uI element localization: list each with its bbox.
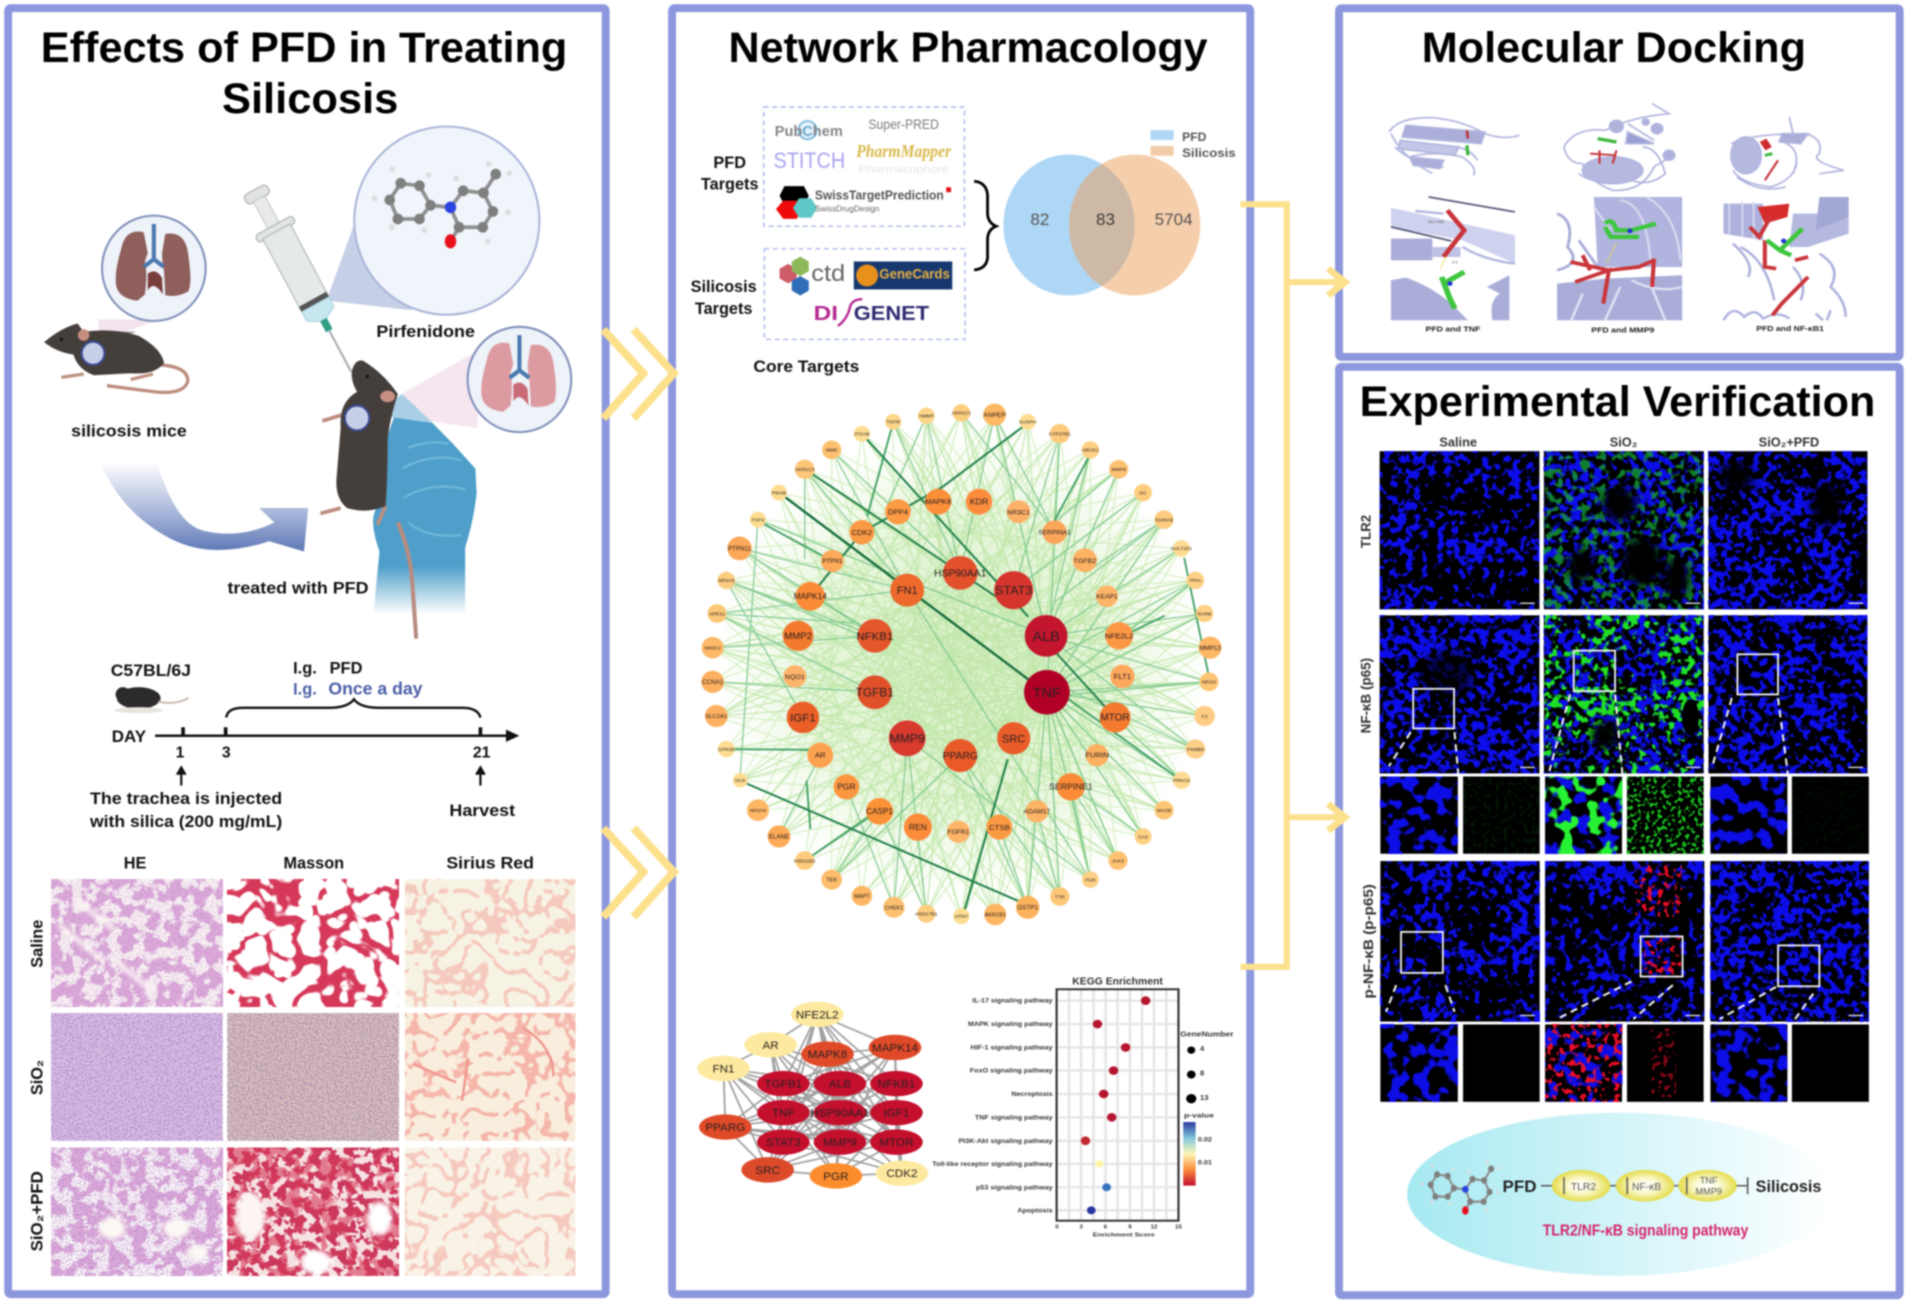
chart: hub gene subnetwork: MAPK8 <box>808 1050 847 1061</box>
nodes: inner ring targets: FLT1 <box>1114 672 1131 681</box>
nodes: outer ring targets: GC <box>1139 491 1147 496</box>
timeline: experimental schedule <box>89 660 519 831</box>
title: Molecular Docking: Molecular Docking <box>1422 24 1806 72</box>
nodes: inner ring targets: SERPINE1 <box>1049 782 1093 792</box>
labels: pathway names: HIF-1 signaling pathway <box>971 1045 1053 1051</box>
nodes: inner ring targets: CTSB <box>989 823 1010 832</box>
nodes: outer ring targets: AKR1B1 <box>985 912 1006 918</box>
text: tracheal silica injection: with silica (200 mg/mL) <box>89 813 282 831</box>
title: Experimental Verification: Experimental Verification <box>1360 378 1875 426</box>
title: Effects of PFD in Treating Silicosis: Silicosis <box>222 75 398 123</box>
icon: recovered lung callout <box>402 327 571 432</box>
nodes: central hub targets: MMP9 <box>890 732 925 746</box>
brace: dosing period <box>226 699 480 718</box>
nodes: outer ring targets: FGF2 <box>752 518 765 523</box>
node: TLR2 <box>1552 1170 1610 1202</box>
nodes: central hub targets: ALB <box>1033 629 1060 645</box>
panel: effects of PFD in treating silicosis <box>8 8 606 1294</box>
logo: DisGeNET: GENET <box>854 302 930 325</box>
nodes: outer ring targets: FGR <box>1085 877 1096 883</box>
labels: pathway names <box>932 998 1053 1214</box>
heading: group row labels: SiO₂ <box>29 1060 47 1095</box>
nodes: outer ring targets: PPIA <box>1190 578 1202 584</box>
nodes: central hub targets: SRC <box>1002 733 1025 745</box>
nodes: outer ring targets: DCK <box>735 778 746 784</box>
nodes: outer ring targets: HSD11B1 <box>794 858 816 864</box>
arrow: connector from network pharmacology to docking and verification <box>1241 204 1345 967</box>
labels: treatment columns: Saline <box>1439 434 1477 449</box>
nodes: inner ring targets: NQO1 <box>785 674 805 681</box>
text: tracheal silica injection <box>89 790 282 831</box>
chart: hub gene subnetwork <box>697 1002 928 1189</box>
labels: pathway names: PI3K-Akt signaling pathway <box>958 1138 1053 1145</box>
chart: hub gene subnetwork: MMP9 <box>823 1138 857 1149</box>
label: Silicosis Targets: Silicosis <box>691 278 757 296</box>
insets: NF-κB SiO2 <box>1545 777 1704 854</box>
nodes: inner ring targets: MTOR <box>1100 713 1130 724</box>
icon: treatment arrow <box>100 462 308 552</box>
chart: hub gene subnetwork: NFE2L2 <box>796 1010 839 1021</box>
nodes: inner ring targets: FURIN <box>1085 751 1109 760</box>
panel: experimental verification <box>1339 367 1900 1295</box>
image: TLR2 SiO2 <box>1544 451 1704 609</box>
nodes: inner ring targets: SERPINA1 <box>1038 529 1071 536</box>
nodes: outer ring targets: MMP8 <box>1112 467 1126 473</box>
legend: gene number: 13 <box>1200 1093 1209 1102</box>
heading: stain column labels <box>124 854 534 872</box>
chart: hub gene subnetwork: STAT3 <box>766 1138 801 1149</box>
image: Sirius Red SiO2 <box>405 1013 575 1141</box>
labels: pathway names: MAPK signaling pathway <box>968 1021 1053 1028</box>
nodes: outer ring targets: CHEK1 <box>885 906 903 911</box>
image: Masson saline <box>227 879 399 1007</box>
icon: silicosis mouse <box>44 323 188 392</box>
legend: p-value colour bar: p-value <box>1184 1113 1214 1120</box>
labels: day numbers <box>176 745 491 762</box>
chart: hub gene subnetwork: SRC <box>755 1165 780 1177</box>
nodes: outer ring targets: TEK <box>826 877 837 883</box>
nodes: inner ring targets: MMP2 <box>784 631 812 642</box>
chart: Venn diagram of targets: 83 <box>1096 210 1115 229</box>
docking: PFD and TNF close-up <box>1391 197 1515 320</box>
docking: PFD and MMP9 close-up <box>1557 197 1682 320</box>
nodes: central hub targets: HSP90AA1 <box>934 569 987 579</box>
nodes: central hub targets: PPARG <box>943 751 978 762</box>
nodes: outer ring targets: MME <box>826 448 838 454</box>
legend: gene number: GeneNumber <box>1180 1030 1234 1038</box>
node: TNF and MMP9: TNF <box>1700 1175 1718 1185</box>
image: HE SiO2+PFD <box>51 1148 223 1276</box>
arrow: silica injection <box>177 767 186 786</box>
nodes: central hub targets: TGFB1 <box>856 687 894 700</box>
labels: day numbers: 21 <box>473 745 491 762</box>
image: NF-κB SiO2 <box>1544 615 1704 773</box>
chart: Venn diagram of targets: 82 <box>1030 210 1049 229</box>
image: Masson SiO2+PFD <box>227 1148 399 1276</box>
nodes: outer ring targets: ABCD1 <box>1082 448 1099 454</box>
image: TLR2 saline <box>1380 451 1539 609</box>
panel: molecular docking <box>1339 8 1900 357</box>
logo: PharmMapper: PharmMapper <box>855 141 951 161</box>
label: I.g. PFD: PFD <box>330 660 363 678</box>
heading: group row labels: Saline <box>29 920 47 968</box>
image: HE SiO2 <box>51 1013 223 1141</box>
nodes: outer ring targets: HTR7 <box>955 914 968 920</box>
protein: NF-κB1 overview <box>1731 117 1844 189</box>
node: NF-κB: NF-κB <box>1632 1182 1661 1193</box>
nodes: inner ring targets: PTPN1 <box>822 558 843 565</box>
inhibition lines <box>1541 1177 1748 1194</box>
logo: faint caption: Pharmacophore <box>859 165 949 176</box>
image: TLR2 SiO2+PFD <box>1708 451 1867 609</box>
label: silicosis mice: silicosis mice <box>71 423 187 441</box>
node: TLR2: TLR2 <box>1571 1182 1596 1193</box>
image: p-NF-κB SiO2+PFD <box>1710 861 1869 1022</box>
nodes: central hub targets <box>856 556 1070 772</box>
label: I.g. PFD: I.g. <box>293 660 317 678</box>
nodes: inner ring targets: FGFR1 <box>948 829 970 836</box>
axis: enrichment score: 6 <box>1104 1225 1108 1231</box>
labels: marker rows: p-NF-κB (p-p65) <box>1361 884 1376 998</box>
label: Core Targets: Core Targets <box>753 358 859 376</box>
legend: p-value colour bar <box>1183 1113 1214 1186</box>
illustration: pirfenidone treatment of silicosis mice <box>44 126 571 639</box>
labels: marker rows: TLR2 <box>1359 515 1374 548</box>
nodes: outer ring targets: GPR35 <box>718 747 735 753</box>
nodes: inner ring targets: AR <box>815 751 826 760</box>
label: treated with PFD: treated with PFD <box>227 579 369 597</box>
axis: enrichment score: 0 <box>1055 1225 1059 1231</box>
heading: group row labels: SiO₂+PFD <box>29 1171 47 1251</box>
labels: docking pairs: PFD and TNF <box>1426 325 1481 333</box>
axis: enrichment score: Enrichment Score <box>1093 1233 1156 1239</box>
image: p-NF-κB saline <box>1380 861 1540 1022</box>
nodes: outer ring targets: APEX1 <box>709 611 725 617</box>
legend: Venn sets: Silicosis <box>1182 146 1236 160</box>
legend: p-value colour bar: 0.02 <box>1198 1137 1212 1143</box>
chart: hub gene subnetwork: MTOR <box>879 1138 914 1149</box>
labels: treatment columns: SiO₂+PFD <box>1759 434 1819 449</box>
logo: SwissTargetPrediction: SwissDrugDesign <box>815 205 879 214</box>
nodes: inner ring targets: MAPK14 <box>794 591 827 601</box>
data: enrichment points <box>1081 996 1150 1214</box>
labels: pathway names: Toll-like receptor signaling pathway <box>932 1161 1053 1168</box>
image: Sirius Red SiO2+PFD <box>405 1148 575 1276</box>
label: PFD Targets <box>701 154 759 194</box>
legend: p-value colour bar: 0.01 <box>1198 1160 1212 1166</box>
nodes: outer ring targets: PRKCK <box>1173 778 1191 784</box>
nodes: outer ring targets: CCNA2 <box>702 679 724 686</box>
nodes: inner ring targets: NFE2L2 <box>1105 631 1133 640</box>
nodes: outer ring targets: JAK3 <box>1112 858 1124 864</box>
insets: NF-κB SiO2+PFD <box>1710 777 1869 854</box>
image: p-NF-κB SiO2 <box>1545 861 1704 1022</box>
nodes: outer ring targets: ELANE <box>769 834 789 841</box>
axis: enrichment score: 3 <box>1079 1225 1084 1231</box>
node: TNF and MMP9 <box>1678 1170 1737 1202</box>
label: C57BL/6J: C57BL/6J <box>111 662 191 680</box>
chart: core target network <box>701 404 1222 925</box>
nodes: central hub targets: FN1 <box>897 585 918 597</box>
nodes: central hub targets: STAT3 <box>995 584 1032 597</box>
labels: pathway names: TNF signaling pathway <box>975 1115 1053 1121</box>
icon: syringe <box>236 180 370 382</box>
axis: enrichment score <box>1055 1225 1183 1239</box>
logo: STITCH: STITCH <box>774 148 845 173</box>
chart: hub gene subnetwork: PPARG <box>705 1122 745 1134</box>
nodes: outer ring targets: MMP13 <box>1199 645 1221 652</box>
nodes: outer ring targets: PSMB9 <box>1187 747 1204 753</box>
labels: pathway names: IL-17 signaling pathway <box>972 998 1053 1005</box>
legend: gene number <box>1180 1030 1234 1103</box>
nodes: inner ring targets: REN <box>909 822 927 832</box>
nodes: outer ring targets: SULT1E1 <box>1171 546 1192 552</box>
nodes: outer ring targets: SLC2A1 <box>705 714 727 720</box>
image: Sirius Red saline <box>405 879 575 1007</box>
nodes: outer ring targets: HSD17B1 <box>915 912 938 918</box>
nodes: outer ring targets: NR1H3 <box>718 578 735 584</box>
nodes: outer ring targets: ITGAB <box>854 432 870 437</box>
nodes: inner ring targets: CASP1 <box>866 807 893 816</box>
image: NF-κB saline <box>1380 615 1539 773</box>
chart: hub gene subnetwork: MAPK14 <box>872 1043 918 1054</box>
nodes: outer ring targets: NR1I2 <box>1202 680 1216 686</box>
labels: docking pairs: PFD and MMP9 <box>1591 326 1654 334</box>
legend: gene number: 4 <box>1200 1044 1205 1053</box>
logo: ctd: ctd <box>811 260 845 286</box>
image: Masson SiO2 <box>227 1013 399 1141</box>
panel: silicosis target databases <box>764 249 965 339</box>
chart: hub gene subnetwork: TNF <box>772 1108 795 1120</box>
labels: day numbers: 3 <box>222 745 231 762</box>
label: Pirfenidone: Pirfenidone <box>376 323 475 341</box>
node: NF-κB <box>1616 1170 1674 1202</box>
docking: PFD and TNF close-up: 2.9 <box>1452 260 1458 265</box>
logo: DisGeNET: DI <box>814 302 838 325</box>
axis: day timeline arrow <box>155 727 519 742</box>
title: Effects of PFD in Treating Silicosis <box>41 24 567 123</box>
labels: marker rows <box>1359 515 1376 998</box>
labels: treatment columns <box>1439 434 1819 449</box>
heading: stain column labels: HE <box>124 854 146 872</box>
logo: GeneCards: GeneCards <box>879 266 950 281</box>
panel: network pharmacology <box>672 8 1250 1294</box>
nodes: inner ring targets: MAPK8 <box>925 497 951 506</box>
nodes: inner ring targets: CDK2 <box>852 528 872 537</box>
label: Silicosis Targets: Targets <box>695 300 752 318</box>
insets: NF-κB saline <box>1380 777 1540 854</box>
insets: p-NF-κB SiO2+PFD <box>1710 1024 1869 1102</box>
axis: enrichment score: 15 <box>1175 1225 1183 1231</box>
insets: p-NF-κB SiO2 <box>1545 1024 1704 1102</box>
labels: pathway names: Necroptosis <box>1011 1091 1053 1098</box>
icon: silicosis lung callout <box>98 216 206 342</box>
labels: day numbers: 1 <box>176 745 185 762</box>
nodes: outer ring targets: AKR1C1 <box>952 411 971 417</box>
chart: Venn diagram of targets <box>1003 130 1236 296</box>
logo: SwissTargetPrediction: SwissTargetPrediction <box>815 187 944 202</box>
nodes: outer ring targets <box>701 404 1222 925</box>
histology grid <box>29 854 575 1276</box>
logo: SwissTargetPrediction <box>776 186 951 219</box>
callout: TLR2/NF-κB signaling pathway <box>1407 1113 1833 1276</box>
axis: enrichment score: 9 <box>1128 1225 1132 1231</box>
nodes: inner ring targets: NR3C1 <box>1007 509 1030 516</box>
title: Effects of PFD in Treating Silicosis: Effects of PFD in Treating <box>41 24 567 72</box>
nodes: outer ring targets: TGFR <box>886 420 900 426</box>
nodes: central hub targets: NFKB1 <box>856 631 893 643</box>
labels: marker rows: NF-κB (p65) <box>1359 658 1374 733</box>
labels: pathway names: Apoptosis <box>1017 1208 1053 1214</box>
label: Silicosis Targets <box>691 278 757 318</box>
chart: hub gene subnetwork: CDK2 <box>886 1169 917 1180</box>
nodes: outer ring targets: SUSPH <box>1019 420 1037 426</box>
icon: PFD molecule <box>1420 1161 1500 1215</box>
nodes: outer ring targets: F2 <box>1202 714 1208 720</box>
label: TLR2/NF-κB signaling pathway: TLR2/NF-κB signaling pathway <box>1543 1223 1749 1240</box>
nodes: inner ring targets: TGFB2 <box>1074 558 1096 565</box>
labels: pathway names: p53 signaling pathway <box>976 1184 1053 1191</box>
chart: hub gene subnetwork: FN1 <box>713 1064 735 1075</box>
label: PFD Targets: PFD <box>713 154 746 172</box>
nodes: outer ring targets: GSTP1 <box>1017 905 1039 911</box>
chart: hub gene subnetwork: IGF1 <box>883 1108 909 1120</box>
nodes: outer ring targets: NR3C2 <box>705 646 721 651</box>
panel: PFD target databases <box>764 107 964 226</box>
nodes: outer ring targets: ANPEP <box>983 412 1006 419</box>
nodes: inner ring targets: ADAM17 <box>1024 809 1051 815</box>
heading: stain column labels: Sirius Red <box>446 854 534 872</box>
legend: Venn sets <box>1151 130 1236 160</box>
nodes: outer ring targets: MAPT <box>854 894 870 900</box>
title: KEGG Enrichment: KEGG Enrichment <box>1072 977 1163 987</box>
brace: merge into venn <box>974 181 996 270</box>
label: DAY: DAY <box>112 727 147 746</box>
chart: hub gene subnetwork: NFKB1 <box>878 1079 915 1090</box>
nodes: inner ring targets: PGR <box>837 782 856 792</box>
label: PFD Targets: Targets <box>701 176 759 194</box>
title: Network Pharmacology: Network Pharmacology <box>729 24 1208 72</box>
labels: docking pairs <box>1426 324 1824 334</box>
annotations: magnified region boxes and zoom guides <box>1386 603 1863 1019</box>
axis: enrichment score: 12 <box>1151 1225 1158 1231</box>
icon: pirfenidone molecule callout <box>326 126 539 315</box>
nodes: outer ring targets: HMMT <box>919 414 934 420</box>
nodes: outer ring targets: NR1H4 <box>750 808 766 814</box>
logo: PubChem: PubChem <box>775 123 843 140</box>
protein: TNF overview <box>1389 118 1519 175</box>
arrow: chevron from effects panel to network pharmacology, lower <box>603 828 674 917</box>
nodes: outer ring targets: AKR1C3 <box>795 467 815 473</box>
labels: pathway names: FoxO signaling pathway <box>970 1068 1053 1074</box>
node: TNF and MMP9: MMP9 <box>1696 1186 1722 1196</box>
nodes: inner ring targets: IGF1 <box>790 713 816 724</box>
text: tracheal silica injection: The trachea is injected <box>90 790 282 808</box>
image: HE saline <box>51 879 223 1007</box>
label: Harvest: Harvest <box>449 802 516 820</box>
nodes: outer ring targets: MAOB <box>1157 808 1172 814</box>
chart: hub gene subnetwork: ALB <box>829 1079 851 1090</box>
legend: gene number: 8 <box>1200 1069 1204 1077</box>
docking: PFD and TNF close-up: GLY-153 <box>1428 219 1444 224</box>
protein: MMP9 overview <box>1564 104 1675 190</box>
icon: black mouse photo <box>114 687 189 713</box>
heading: group row labels <box>29 920 47 1251</box>
nodes: outer ring targets: PTPN11 <box>728 546 752 553</box>
nodes: central hub targets: TNF <box>1033 685 1061 701</box>
nodes: outer ring targets: CYP27B1 <box>1049 432 1071 437</box>
label: Silicosis: Silicosis <box>1756 1177 1821 1196</box>
nodes: inner ring targets: KEAP1 <box>1096 593 1118 600</box>
docking: PFD and NF-κB1 close-up <box>1724 197 1849 320</box>
nodes: outer ring targets: S100A9 <box>1155 518 1173 523</box>
heading: stain column labels: Masson <box>283 854 344 872</box>
nodes: outer ring targets: PIK4B <box>772 491 787 496</box>
nodes: inner ring targets: DPP4 <box>888 507 909 516</box>
label: I.g. Once a day: I.g. <box>293 680 317 698</box>
chart: hub gene subnetwork: HSP90AA1 <box>810 1108 869 1120</box>
label: PFD: PFD <box>1502 1177 1537 1196</box>
image: NF-κB SiO2+PFD <box>1708 615 1867 773</box>
chart: hub gene subnetwork: AR <box>762 1040 779 1052</box>
nodes: outer ring targets: RARB <box>1198 611 1212 617</box>
chart: hub gene subnetwork: PGR <box>823 1171 849 1183</box>
labels: treatment columns: SiO₂ <box>1610 434 1637 449</box>
icon: gloved hand holding treated mouse <box>320 360 477 639</box>
logo: DisGeNET <box>814 299 930 326</box>
label: I.g. Once a day: Once a day <box>328 678 423 698</box>
logo: Super-PRED: Super-PRED <box>868 116 939 132</box>
insets: p-NF-κB saline <box>1380 1024 1540 1102</box>
arrow: harvest <box>476 767 485 786</box>
chart: KEGG enrichment bubble plot <box>932 977 1234 1239</box>
nodes: outer ring targets: TTR <box>1055 894 1065 900</box>
arrow: chevron from effects panel to network pharmacology, upper <box>603 330 674 418</box>
logo: GeneCards <box>854 261 952 289</box>
legend: Venn sets: PFD <box>1182 130 1207 144</box>
labels: docking pairs: PFD and NF-κB1 <box>1756 324 1824 333</box>
logo: ctd <box>780 257 845 296</box>
nodes: inner ring targets: KDR <box>970 497 988 507</box>
chart: hub gene subnetwork: TGFB1 <box>765 1079 802 1090</box>
nodes: outer ring targets: CA2 <box>1138 834 1148 840</box>
nodes: inner ring targets <box>783 489 1135 843</box>
chart: Venn diagram of targets: 5704 <box>1155 210 1193 229</box>
